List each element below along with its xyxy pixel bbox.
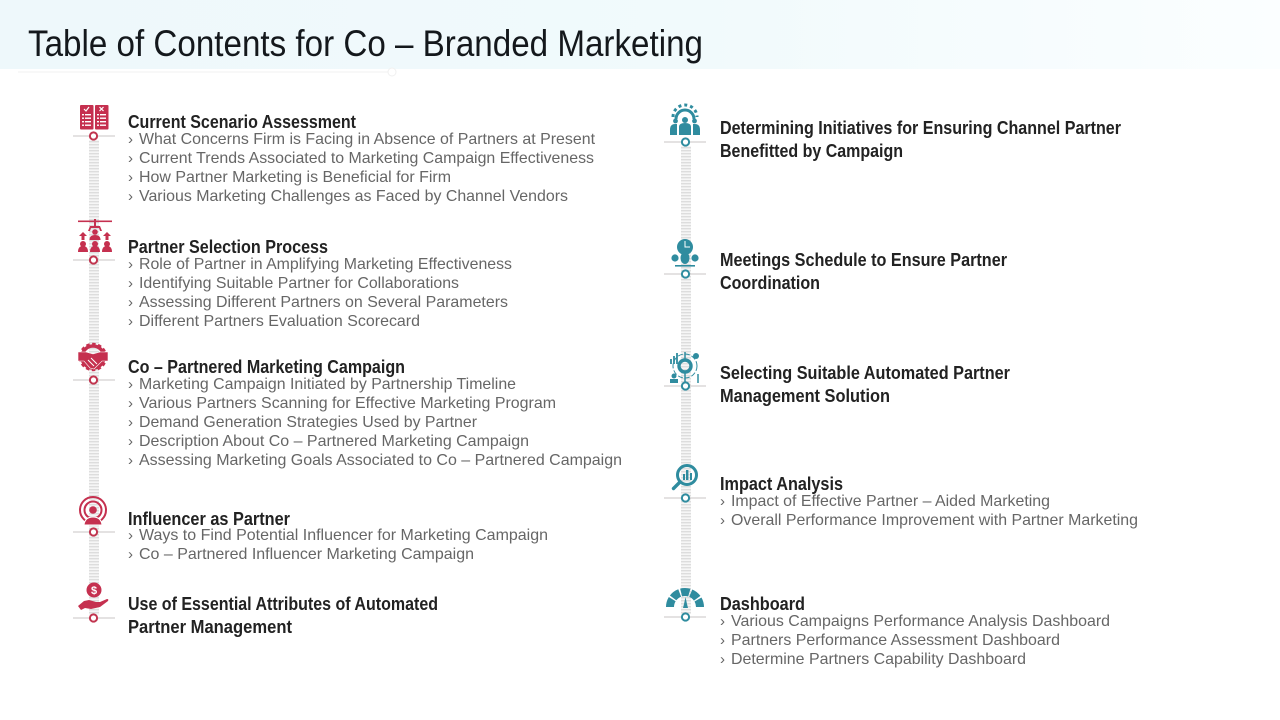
section: Co – Partnered Marketing Campaign: [128, 357, 622, 469]
section: Co – Partnered Marketing Campaign: ›: [128, 414, 133, 431]
section: Current Scenario Assessment: ›: [128, 131, 133, 148]
icon: checklist book: [80, 105, 108, 130]
section: Current Scenario Assessment: How Partner Marketing is Beneficial for Firm: [139, 169, 451, 186]
section: Dashboard: Determine Partners Capability Dashboard: [731, 651, 1026, 668]
section: Determining Initiatives: Benefitted by Campaign: [720, 141, 903, 161]
section: Influencer as Partner: ›: [128, 527, 133, 544]
right timeline: [664, 138, 706, 621]
icon: hand holding coin: $: [91, 585, 97, 597]
section: Determining Initiatives: Determining Initiatives for Ensuring Channel Partner: [720, 118, 1121, 138]
icon: hand holding coin: [78, 582, 108, 610]
section: Partner Selection Process: ›: [128, 313, 133, 330]
section: Impact Analysis: ›: [720, 493, 725, 510]
section: Use of Essential Attributes of Automated Partner Management: Partner Management: [128, 617, 292, 637]
section: Selecting Suitable Automated Partner Management Solution: [720, 363, 1010, 406]
section: Partner Selection Process: Assessing Different Partners on Several Parameters: [139, 294, 508, 311]
section: Dashboard: ›: [720, 613, 725, 630]
section: Current Scenario Assessment: ›: [128, 188, 133, 205]
section: Current Scenario Assessment: [128, 112, 596, 205]
icon: handshake gear: [78, 344, 108, 370]
section: Meetings Schedule: [720, 250, 1007, 293]
section: Impact Analysis: ›: [720, 512, 725, 529]
section: Co – Partnered Marketing Campaign: Co – Partnered Marketing Campaign: [128, 357, 405, 377]
section: Influencer as Partner: Influencer as Partner: [128, 509, 290, 529]
section: Partner Selection Process: Role of Partner in Amplifying Marketing Effectiveness: [139, 256, 512, 273]
section: Current Scenario Assessment: Various Marketing Challenges as Faced by Channel Vendors: [139, 188, 568, 205]
title: Table of Contents for Co – Branded Marketing: [28, 23, 703, 64]
section: Impact Analysis: [720, 474, 1138, 529]
section: Co – Partnered Marketing Campaign: Various Partners Scanning for Effective Marketing Program: [139, 395, 556, 412]
header band: [0, 0, 1280, 69]
icon: influencer target: [80, 497, 106, 525]
section: Current Scenario Assessment: What Concerns Firm is Facing in Absence of Partners at Present: [139, 131, 596, 148]
section: Current Scenario Assessment: Current Trends Associated to Marketing Campaign Effectiveness: [139, 150, 594, 167]
section: Influencer as Partner: Co – Partnered Influencer Marketing Campaign: [139, 546, 474, 563]
section: Co – Partnered Marketing Campaign: ›: [128, 433, 133, 450]
section: Partner Selection Process: ›: [128, 256, 133, 273]
section: Dashboard: ›: [720, 632, 725, 649]
section: Current Scenario Assessment: Current Scenario Assessment: [128, 112, 356, 132]
section: Dashboard: [720, 594, 1110, 668]
section: Co – Partnered Marketing Campaign: Assessing Marketing Goals Associated to Co – Partnered Campaign: [139, 452, 622, 469]
icon: automated management hub: [670, 352, 699, 383]
section: Impact Analysis: Overall Performance Improvement with Partner Marketing: [731, 512, 1138, 529]
section: Dashboard: Dashboard: [720, 594, 805, 614]
section: Co – Partnered Marketing Campaign: ›: [128, 452, 133, 469]
section: Use of Essential Attributes of Automated Partner Management: Use of Essential Attributes of Automated: [128, 594, 438, 614]
section: Selecting Suitable Automated Partner Management Solution: Selecting Suitable Automated Partner: [720, 363, 1010, 383]
section: Dashboard: Various Campaigns Performance Analysis Dashboard: [731, 613, 1110, 630]
section: Dashboard: Partners Performance Assessment Dashboard: [731, 632, 1060, 649]
section: Determining Initiatives: [720, 118, 1121, 161]
section: Selecting Suitable Automated Partner Management Solution: Management Solution: [720, 386, 890, 406]
section: Meetings Schedule: Meetings Schedule to Ensure Partner: [720, 250, 1007, 270]
icon: partner selection people: [78, 219, 112, 252]
section: Current Scenario Assessment: ›: [128, 150, 133, 167]
section: Partner Selection Process: ›: [128, 294, 133, 311]
section: Partner Selection Process: Different Partners Evaluation Scorecard: [139, 313, 420, 330]
section: Co – Partnered Marketing Campaign: ›: [128, 395, 133, 412]
icon: gear and team: [670, 105, 700, 135]
section: Co – Partnered Marketing Campaign: ›: [128, 376, 133, 393]
icon: dashboard gauge: [670, 592, 700, 608]
section: Use of Essential Attributes of Automated Partner Management: [128, 594, 438, 637]
section: Partner Selection Process: Partner Selection Process: [128, 237, 328, 257]
section: Meetings Schedule: Coordination: [720, 273, 820, 293]
section: Impact Analysis: Impact of Effective Partner – Aided Marketing: [731, 493, 1050, 510]
section: Partner Selection Process: ›: [128, 275, 133, 292]
section: Dashboard: ›: [720, 651, 725, 668]
icon: magnifier chart: [674, 466, 696, 488]
icon: meeting clock: [671, 239, 699, 267]
section: Partner Selection Process: [128, 237, 512, 330]
section: Current Scenario Assessment: ›: [128, 169, 133, 186]
section: Influencer as Partner: Ways to Find Potential Influencer for Marketing Campaign: [139, 527, 548, 544]
left timeline: [73, 132, 115, 622]
section: Impact Analysis: Impact Analysis: [720, 474, 843, 494]
section: Partner Selection Process: Identifying Suitable Partner for Collaborations: [139, 275, 459, 292]
section: Co – Partnered Marketing Campaign: Marketing Campaign Initiated by Partnership Timeline: [139, 376, 516, 393]
section: Influencer as Partner: [128, 509, 548, 563]
section: Influencer as Partner: ›: [128, 546, 133, 563]
section: Co – Partnered Marketing Campaign: Demand Generation Strategies Used by Partner: [139, 414, 478, 431]
section: Co – Partnered Marketing Campaign: Description About Co – Partnered Marketing Campaign: [139, 433, 529, 450]
